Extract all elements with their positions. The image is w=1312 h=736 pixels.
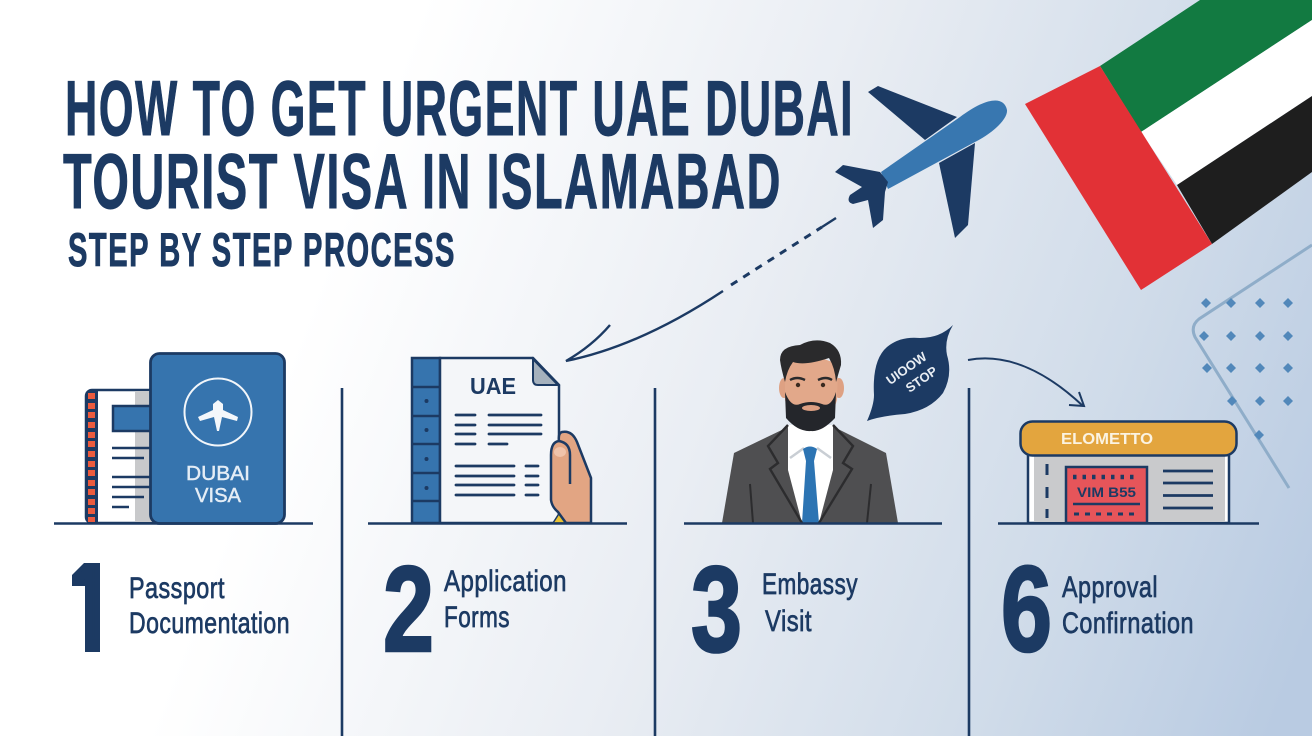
icon: application form: UAE xyxy=(470,373,516,399)
icon: approval office xyxy=(1020,422,1236,523)
icon: approval office: VIM B55 xyxy=(1077,484,1136,500)
title xyxy=(63,64,854,276)
number 1: 1 xyxy=(67,541,107,677)
step 1: passport documentation xyxy=(54,354,313,677)
number 3: 3 xyxy=(691,541,742,677)
label: approval confirmation xyxy=(1062,571,1194,640)
step 3: embassy visit xyxy=(684,325,953,677)
dividers xyxy=(342,388,969,736)
number 2: 2 xyxy=(383,541,434,677)
label: passport documentation: Passport xyxy=(129,572,225,605)
label: approval confirmation: Confirnation xyxy=(1062,607,1194,640)
baseline xyxy=(368,522,627,525)
label: passport documentation: Documentation xyxy=(129,607,290,640)
icon: application form xyxy=(412,358,591,523)
label: approval confirmation: Approval xyxy=(1062,571,1158,604)
title: TOURIST VISA IN ISLAMABAD xyxy=(63,137,782,225)
number 6: 6 xyxy=(1001,541,1052,677)
label: passport documentation xyxy=(129,572,290,640)
arrow: to approval xyxy=(968,358,1084,406)
label: application forms: Forms xyxy=(444,601,510,634)
icon: passport: DUBAI xyxy=(186,463,250,485)
number 1 xyxy=(72,563,100,652)
baseline xyxy=(998,522,1259,525)
label: application forms xyxy=(444,565,567,634)
icon: UAE flag xyxy=(1025,0,1312,290)
callout: speech bubble: UIOOW xyxy=(883,349,930,388)
icon: airplane xyxy=(835,86,1007,238)
label: embassy visit: Embassy xyxy=(762,568,858,601)
arrow: flight path xyxy=(566,218,836,361)
icon: passport: VISA xyxy=(195,485,242,507)
label: embassy visit xyxy=(762,568,858,638)
icon: passport xyxy=(86,354,284,524)
baseline xyxy=(684,522,942,525)
baseline xyxy=(54,522,313,525)
decorative dots and line xyxy=(1193,245,1312,488)
step 2: application forms xyxy=(368,358,627,677)
label: application forms: Application xyxy=(444,565,567,598)
step 4: approval confirmation xyxy=(998,422,1259,677)
icon: approval office: ELOMETTO xyxy=(1061,431,1153,448)
title: STEP BY STEP PROCESS xyxy=(68,223,456,276)
callout: speech bubble xyxy=(867,325,953,421)
label: embassy visit: Visit xyxy=(765,605,812,638)
icon: man in suit xyxy=(722,340,898,523)
callout: speech bubble: STOP xyxy=(903,363,940,395)
